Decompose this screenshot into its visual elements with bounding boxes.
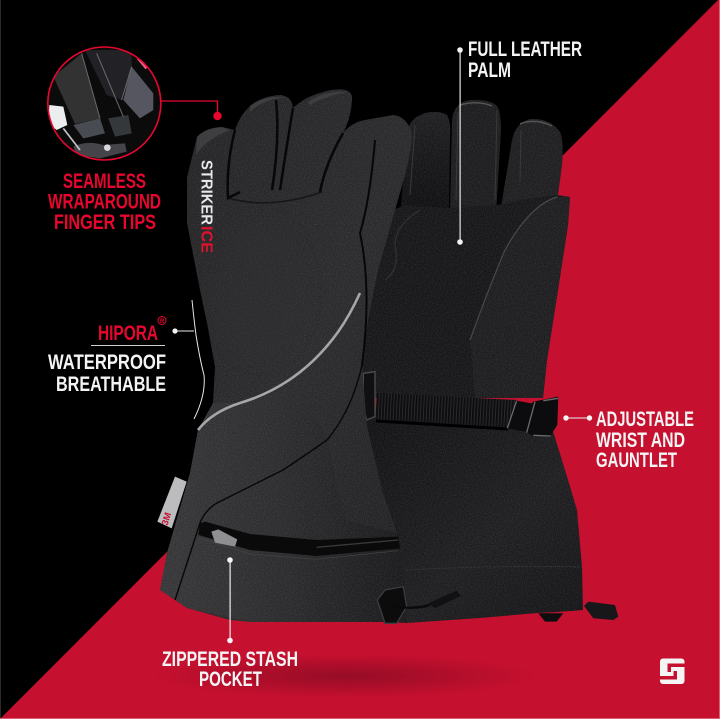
heading: full leather palm: PALM (468, 59, 511, 82)
heading: full leather palm (468, 38, 582, 82)
connector: fingertip (161, 101, 222, 120)
callout: hipora: HIPORA (98, 322, 158, 345)
back glove: leather palm side (358, 100, 570, 398)
thinsulate label (157, 477, 187, 528)
connector: zippered pocket (227, 557, 233, 643)
heading: seamless wraparound finger tips (48, 170, 161, 234)
right drawcord toggle (538, 602, 618, 622)
callout: hipora: R (160, 319, 165, 325)
icon: zipper pull (211, 529, 237, 547)
thinsulate label: 3M (160, 511, 173, 527)
ground shadow (155, 654, 535, 698)
heading: seamless wraparound finger tips: WRAPAROUND (48, 190, 161, 214)
callout: hipora (48, 316, 166, 396)
left drawcord toggle (377, 587, 461, 623)
strap buckle (363, 372, 558, 437)
image edge lines (0, 0, 1, 719)
heading: seamless wraparound finger tips: FINGER TIPS (54, 211, 156, 234)
finger creases and seams (175, 100, 375, 600)
callout: inset fingertip photo (47, 46, 162, 161)
brand logo: Striker Ice: ICE (198, 226, 214, 253)
heading: adjustable wrist and gauntlet (596, 408, 694, 472)
zipper pocket (197, 522, 400, 559)
leather seams and highlights (385, 103, 557, 340)
gauntlet hem stitching (405, 566, 582, 570)
front glove shell (160, 89, 412, 622)
connector: adjustable wrist (563, 415, 592, 421)
icon: S brand logo (660, 658, 684, 684)
heading: seamless wraparound finger tips: SEAMLESS (63, 170, 146, 193)
front glove cuff shading (160, 385, 407, 622)
heading: zippered stash pocket: POCKET (199, 668, 262, 691)
heading: zippered stash pocket (162, 648, 298, 691)
callout: hipora: WATERPROOF (48, 351, 166, 374)
back glove: gauntlet (352, 412, 583, 623)
callout: hipora: BREATHABLE (56, 373, 166, 396)
heading: adjustable wrist and gauntlet: GAUNTLET (596, 449, 677, 472)
fingertip highlights (196, 92, 348, 155)
brand logo: Striker Ice: STRIKER (198, 160, 214, 225)
heading: zippered stash pocket: ZIPPERED STASH (162, 648, 298, 671)
heading: adjustable wrist and gauntlet: WRIST AND (596, 429, 685, 452)
reflective piping (198, 293, 360, 430)
connector: full leather palm (457, 47, 463, 245)
soft highlight on glove back (215, 220, 305, 360)
connector: hipora bracket (172, 300, 204, 419)
wrist strap (375, 393, 517, 429)
heading: full leather palm: FULL LEATHER (468, 38, 582, 61)
